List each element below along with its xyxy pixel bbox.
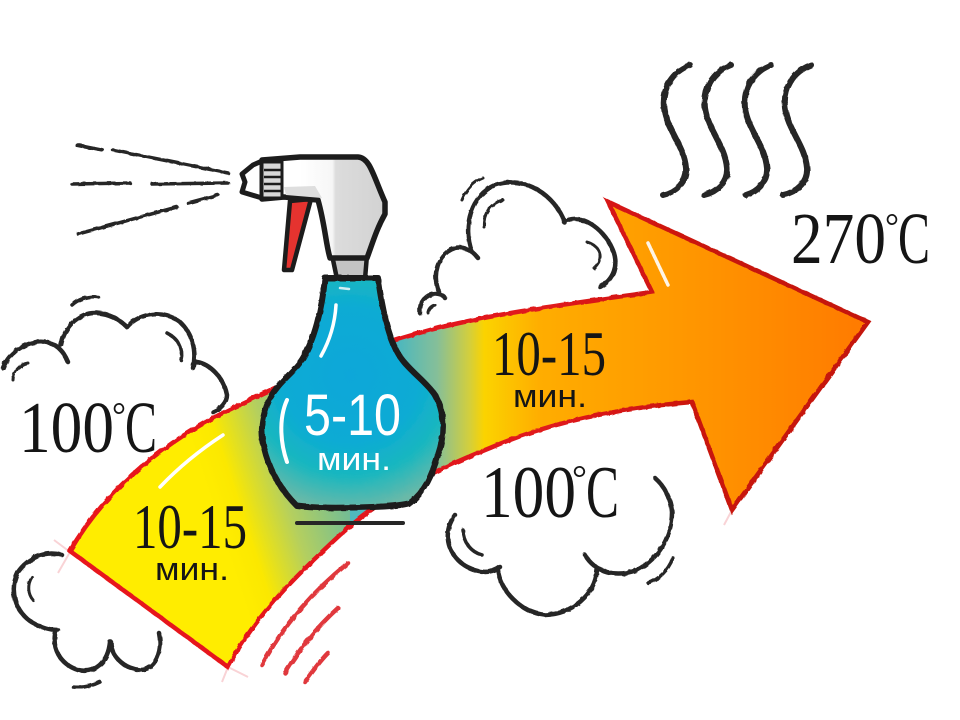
arrow outline bbox=[70, 202, 868, 667]
speed lines bbox=[262, 563, 348, 682]
label: 100°C lower: C bbox=[586, 452, 619, 534]
label: 100°C left: C bbox=[125, 387, 157, 468]
bottle base line bbox=[297, 521, 403, 525]
label: 10-15 мин. middle: 10-15 bbox=[492, 318, 606, 389]
label: 10-15 мин. tail: мин. bbox=[155, 551, 229, 587]
label: 100°C lower: 100 bbox=[481, 452, 576, 534]
arrow corner smudges bbox=[54, 510, 732, 682]
cloud: left bbox=[3, 297, 227, 412]
spray head bbox=[262, 157, 385, 258]
arrow highlights bbox=[160, 243, 668, 487]
label: 100°C left: 100 bbox=[19, 387, 114, 468]
label: 5-10 мин. on bottle: мин. bbox=[317, 441, 391, 477]
head shadow band bbox=[284, 186, 322, 198]
spray mist lines bbox=[72, 145, 228, 234]
label: 270°C: ° bbox=[885, 206, 899, 246]
label: 10-15 мин. middle: мин. bbox=[513, 378, 587, 414]
label: 10-15 мин. tail: 10-15 bbox=[133, 491, 247, 562]
bottle body bbox=[262, 278, 443, 508]
icon: red trigger bbox=[284, 199, 311, 270]
spray bottle bbox=[242, 157, 443, 523]
label: 270°C: C bbox=[898, 198, 930, 279]
curved arrow bbox=[54, 202, 868, 682]
label: 10-15 мин. middle bbox=[492, 318, 606, 414]
nozzle ribs bbox=[262, 162, 282, 198]
cloud: upper middle bbox=[420, 178, 615, 313]
arrow fill: teal to orange head bbox=[350, 206, 865, 521]
label: 100°C lower: ° bbox=[572, 458, 587, 498]
steam lines above arrow bbox=[663, 65, 811, 195]
bottle collar bbox=[332, 255, 367, 279]
nozzle tip bbox=[242, 161, 262, 198]
label: 10-15 мин. tail bbox=[133, 491, 247, 587]
bottle highlights bbox=[281, 288, 349, 462]
label: 5-10 мин. on bottle bbox=[304, 383, 401, 477]
label: 270°C: 270 bbox=[791, 198, 886, 279]
label: 5-10 мин. on bottle: 5-10 bbox=[304, 383, 401, 448]
cloud: lower middle bbox=[448, 478, 673, 615]
arrow fill: yellow to teal tail bbox=[74, 392, 350, 664]
cloud: bottom left bbox=[14, 554, 160, 687]
label: 100°C left: ° bbox=[112, 395, 126, 435]
